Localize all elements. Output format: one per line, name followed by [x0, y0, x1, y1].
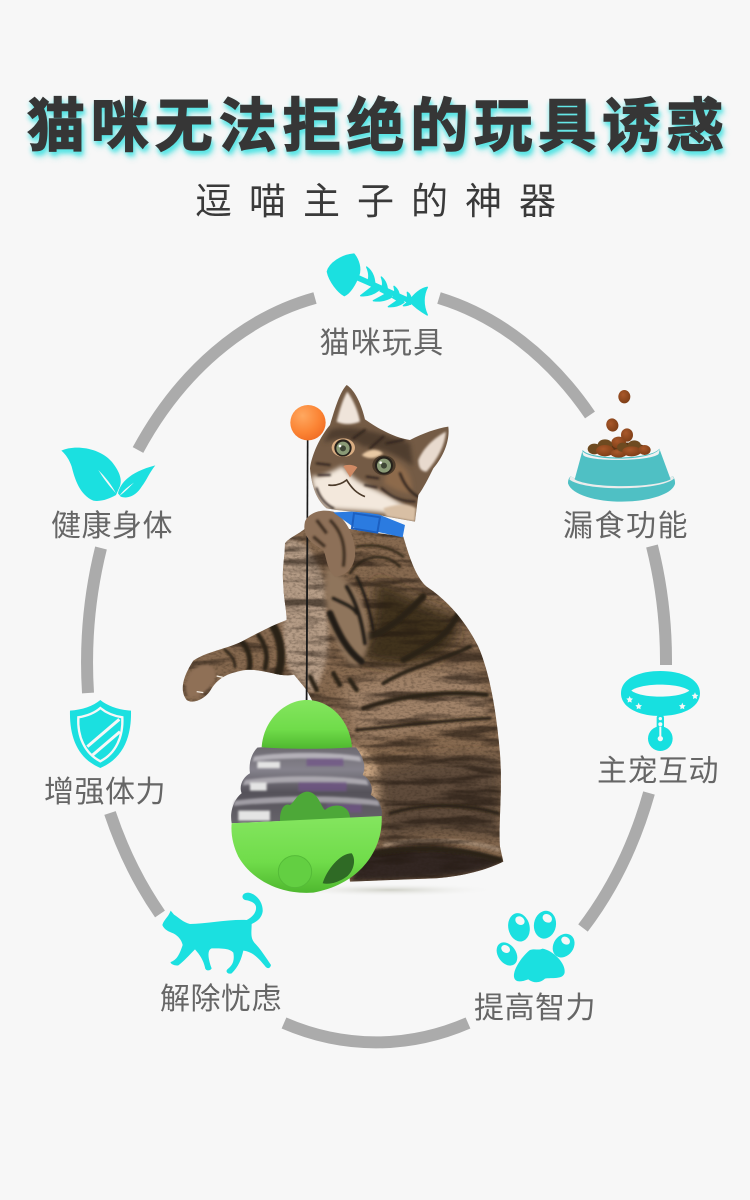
subtitle: 逗喵主子的神器 [195, 181, 573, 222]
cat: neck tan [383, 505, 416, 522]
item: 健康身体 [51, 448, 173, 543]
cat: muzzle [312, 466, 410, 513]
cat: head [310, 385, 449, 522]
item: 主宠互动 [597, 671, 719, 788]
toy: button [278, 856, 312, 888]
icon: pet collar [621, 671, 700, 751]
cat: nose and mouth [343, 465, 357, 477]
label: 健康身体 [51, 510, 173, 543]
tumbler toy [231, 700, 382, 893]
icon: shield [70, 700, 131, 768]
toy shadow [283, 883, 497, 897]
cat: ears inner [337, 392, 360, 424]
cat: eyes [332, 438, 355, 457]
title: 猫咪无法拒绝的玩具诱惑 [27, 94, 730, 159]
item: 提高智力 [474, 909, 596, 1025]
diagram: feature ring with cat and toy [45, 253, 717, 1048]
body tone patches [360, 580, 457, 665]
item: 猫咪玩具 [320, 254, 444, 360]
label: 提高智力 [474, 992, 596, 1025]
icon: food bowl [568, 390, 675, 502]
cat: head markings [317, 430, 418, 508]
toy stick [304, 440, 310, 700]
label: 漏食功能 [563, 510, 689, 543]
ring: segmented grey ellipse [87, 298, 666, 1042]
icon: fish bone [327, 254, 427, 315]
cat: raised paw [304, 511, 355, 577]
label: 主宠互动 [597, 755, 719, 788]
toy: dispensing hole [323, 853, 354, 884]
tiger stripes [225, 545, 500, 860]
chest light fur [280, 538, 329, 693]
icon: leaves [61, 448, 155, 501]
illustration: cat with tumbler toy [183, 385, 503, 897]
cat: raised forearm [325, 567, 373, 666]
toy: green dome [262, 700, 352, 749]
cat: body [183, 523, 503, 882]
label: 猫咪玩具 [320, 327, 444, 360]
label: 解除忧虑 [160, 983, 282, 1016]
left paw shading [186, 665, 215, 697]
front paw claws [197, 676, 223, 693]
toy: glass tiers [231, 746, 382, 823]
item: 增强体力 [44, 700, 166, 809]
toy: green pegs [280, 792, 350, 823]
label: 增强体力 [44, 776, 166, 809]
icon: cat silhouette [162, 893, 271, 974]
item: 解除忧虑 [160, 893, 282, 1016]
toy: stick over paw [304, 540, 310, 700]
cat: dark forehead [323, 428, 413, 467]
fur grain [183, 523, 503, 882]
fur banding [183, 523, 503, 882]
icon: paw print [492, 909, 579, 982]
toy: green base [231, 816, 382, 893]
cat: warm cheek [383, 460, 412, 493]
item: 漏食功能 [563, 390, 689, 543]
cat: blue collar [333, 512, 405, 537]
toy orange ball [290, 405, 326, 440]
